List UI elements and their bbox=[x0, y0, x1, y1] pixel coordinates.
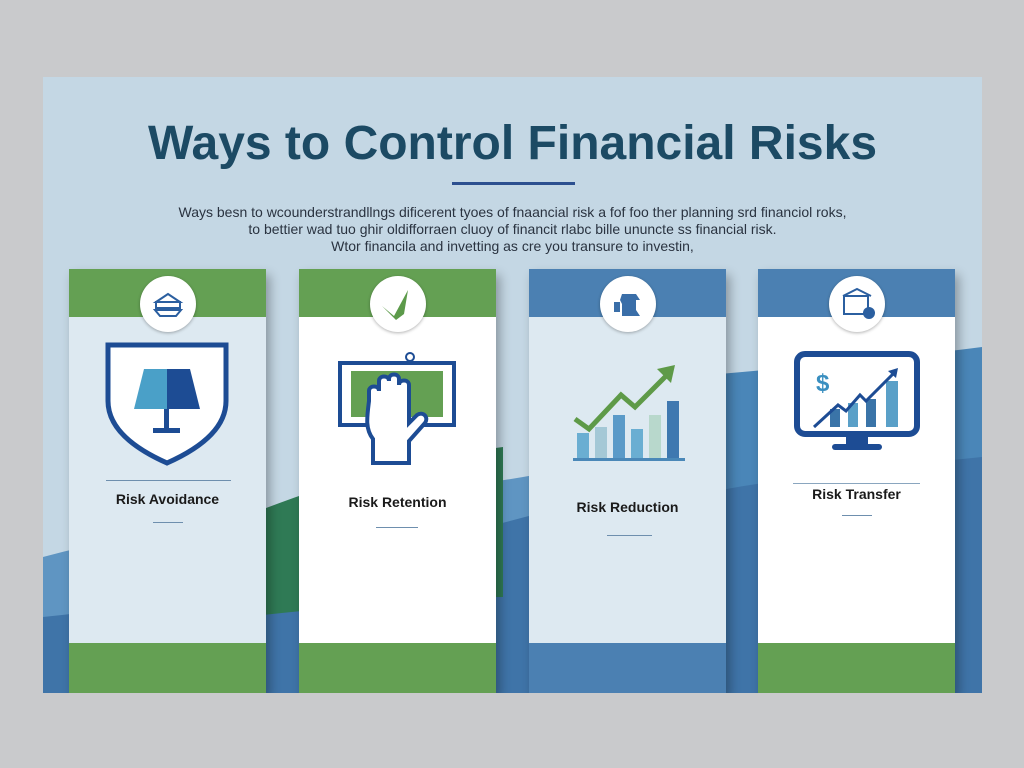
chart: bars with arrow bbox=[573, 365, 685, 461]
icon: shield with lamp bbox=[106, 342, 228, 466]
icon: bank bbox=[829, 276, 885, 332]
subtitle: Wtor financila and invetting as cre you transure to investin, bbox=[331, 238, 694, 254]
card: Risk Avoidance bbox=[69, 269, 266, 693]
title underline bbox=[452, 182, 575, 185]
background waves bbox=[43, 347, 982, 693]
card: Risk Transfer bbox=[758, 269, 955, 693]
label: Risk Retention bbox=[348, 494, 446, 510]
icon: monitor with chart: $ bbox=[816, 370, 830, 397]
icon: checkmark bbox=[370, 276, 426, 332]
subtitle: Ways besn to wcounderstrandllngs dificerent tyoes of fnaancial risk a fof foo ther planning srd financiol roks, bbox=[179, 204, 846, 220]
icon: hand on bill bbox=[338, 352, 456, 465]
label: Risk Transfer bbox=[812, 486, 901, 502]
title: Ways to Control Financial Risks bbox=[148, 117, 877, 170]
icon: tools bbox=[600, 276, 656, 332]
card: Risk Retention bbox=[299, 269, 496, 693]
label: Risk Avoidance bbox=[116, 491, 219, 507]
label: Risk Reduction bbox=[577, 499, 678, 515]
subtitle: to bettier wad tuo ghir oldifforraen cluoy of financit rlabc bille ununcte ss financial risk. bbox=[248, 221, 777, 237]
main panel bbox=[43, 77, 982, 693]
icon: building bbox=[140, 276, 196, 332]
subtitle bbox=[178, 204, 846, 254]
card: Risk Reduction bbox=[529, 269, 726, 693]
icon: monitor with chart bbox=[794, 351, 920, 450]
